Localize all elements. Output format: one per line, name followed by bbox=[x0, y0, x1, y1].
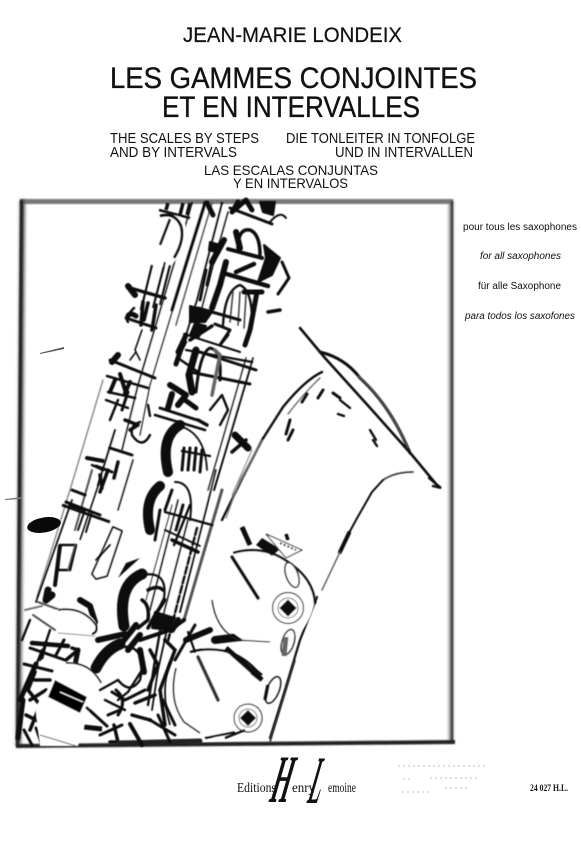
saxophone range text: for all saxophones bbox=[480, 251, 561, 262]
German subtitle: DIE TONLEITER IN TONFOLGE bbox=[286, 131, 475, 147]
publisher logo bbox=[237, 743, 356, 819]
left side keys bbox=[66, 286, 248, 532]
upper body tubes bbox=[24, 203, 290, 740]
Spanish subtitle: Y EN INTERVALOS bbox=[233, 175, 348, 191]
photo frame bbox=[5, 199, 455, 748]
bottom pad with black label bbox=[35, 662, 108, 746]
Spanish subtitle: LAS ESCALAS CONJUNTAS bbox=[204, 162, 378, 178]
top pad bbox=[141, 203, 193, 310]
large paddle key bbox=[62, 480, 140, 579]
crescent key details bbox=[100, 425, 212, 720]
faded stamp bbox=[398, 766, 487, 792]
upper key clusters bbox=[176, 200, 289, 395]
saxophone illustration bbox=[18, 200, 441, 746]
saxophone range text: pour tous les saxophones bbox=[463, 222, 577, 233]
publisher logo: L bbox=[301, 744, 335, 819]
main title: LES GAMMES CONJOINTES bbox=[110, 62, 477, 95]
saxophone range text bbox=[463, 222, 577, 322]
large lower-bell pad 1 bbox=[212, 527, 315, 656]
bottom bracket and keywork bbox=[100, 620, 240, 745]
publisher logo: H bbox=[264, 743, 303, 818]
German subtitle bbox=[286, 131, 475, 161]
main title: ET EN INTERVALLES bbox=[162, 91, 420, 124]
small left black key bbox=[26, 515, 62, 535]
saxophone range text: para todos los saxofones bbox=[464, 311, 575, 322]
publisher logo: enry bbox=[292, 780, 315, 795]
German subtitle: UND IN INTERVALLEN bbox=[335, 145, 473, 161]
saxophone bell bbox=[200, 328, 441, 742]
publisher logo: emoine bbox=[328, 780, 356, 795]
publisher logo: Editions bbox=[237, 780, 276, 795]
dark crescent keys bbox=[96, 425, 180, 668]
catalogue number: 24 027 H.L. bbox=[530, 783, 568, 793]
oval key bbox=[51, 602, 101, 638]
English subtitle: THE SCALES BY STEPS bbox=[110, 131, 259, 147]
lower left tubes and guards bbox=[18, 500, 110, 745]
main title bbox=[110, 62, 477, 124]
saxophone range text: für alle Saxophone bbox=[478, 281, 561, 292]
Spanish subtitle bbox=[204, 162, 378, 191]
English subtitle: AND BY INTERVALS bbox=[110, 145, 237, 161]
large lower-bell pad 2 bbox=[165, 647, 295, 742]
author name: JEAN-MARIE LONDEIX bbox=[183, 24, 402, 47]
English subtitle bbox=[110, 131, 259, 161]
